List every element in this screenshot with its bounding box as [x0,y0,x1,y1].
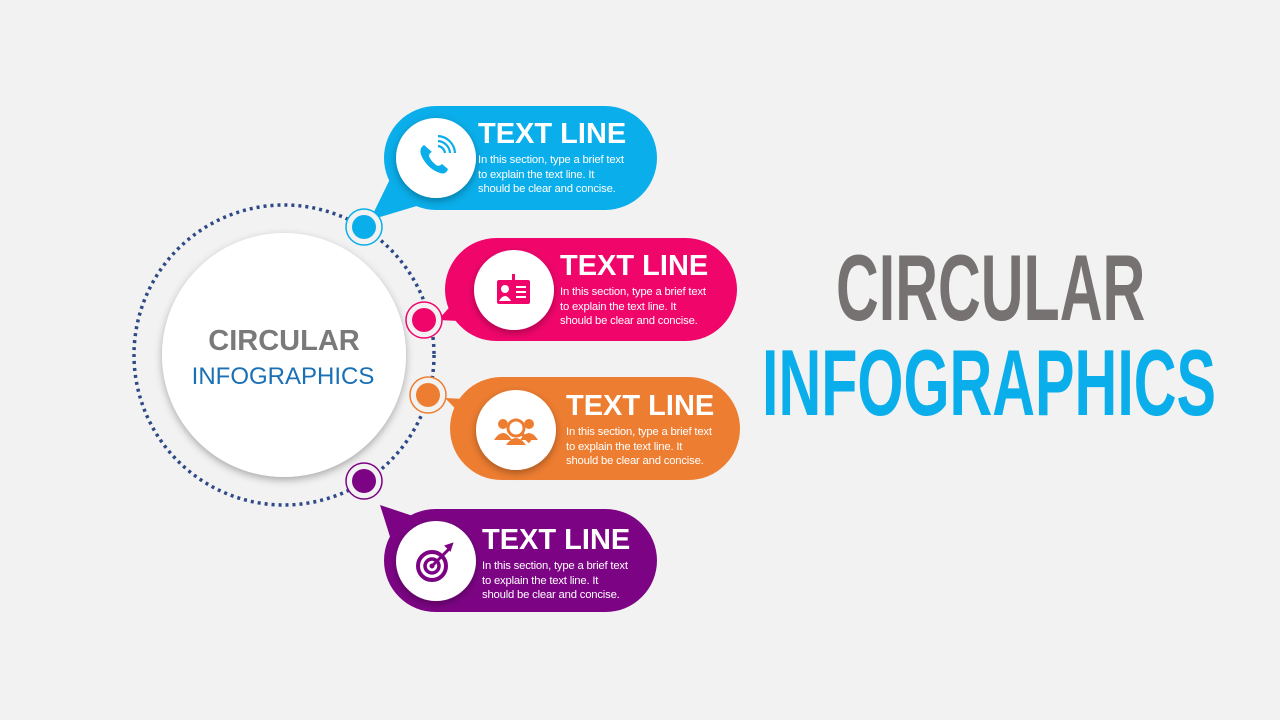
text pink: should be clear and concise. [560,315,698,327]
text blue [478,118,626,195]
callout orange [410,377,740,480]
text purple [482,524,630,601]
callout blue [346,106,657,245]
text purple: to explain the text line. It [482,575,598,587]
center circle [162,233,406,477]
text blue: In this section, type a brief text [478,154,624,166]
text pink [560,250,708,327]
text purple: should be clear and concise. [482,589,620,601]
center circle: INFOGRAPHICS [192,363,374,390]
callout purple [346,463,657,612]
icon: phone [420,136,455,174]
title: infographics: INFOGRAPHICS [762,330,1216,435]
text orange: TEXT LINE [566,390,714,422]
icon: target [418,544,452,580]
text purple: In this section, type a brief text [482,560,628,572]
text orange: should be clear and concise. [566,455,704,467]
text pink: In this section, type a brief text [560,286,706,298]
text purple: TEXT LINE [482,524,630,556]
text blue: TEXT LINE [478,118,626,150]
callout pink [406,238,737,341]
icon: search people [494,419,538,445]
text pink: TEXT LINE [560,250,708,282]
text blue: to explain the text line. It [478,169,594,181]
text pink: to explain the text line. It [560,301,676,313]
title: circular: CIRCULAR [836,235,1145,340]
text orange: to explain the text line. It [566,441,682,453]
center circle: CIRCULAR [208,325,360,357]
dotted ring [134,205,434,505]
text orange [566,390,714,467]
text orange: In this section, type a brief text [566,426,712,438]
icon: id card [497,274,530,304]
text blue: should be clear and concise. [478,183,616,195]
